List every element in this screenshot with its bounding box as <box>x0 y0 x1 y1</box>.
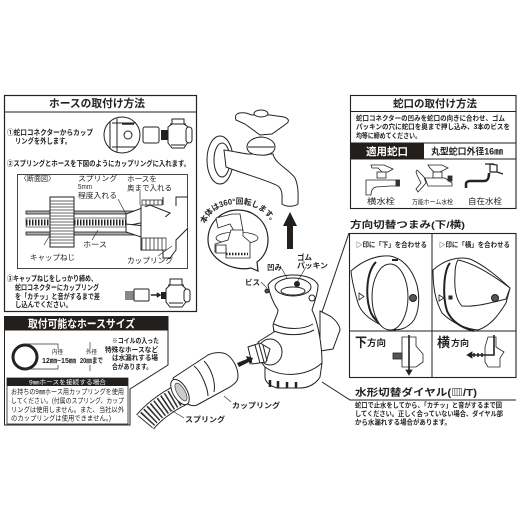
callout: rotates 360 degrees: 本体は360°回転します。 <box>200 197 274 224</box>
illustration: knob down <box>351 256 419 330</box>
diagram: hose ring dimensions <box>13 342 103 371</box>
labels: connector parts: スプリング <box>185 414 226 424</box>
step 3 text: ③キャップねじをしっかり締め、 <box>7 274 97 283</box>
labels: faucet types <box>367 196 502 206</box>
illustration: connector body <box>248 275 340 388</box>
box: connecting a 9mm hose <box>7 378 128 424</box>
cross section box: ホースを <box>127 174 157 184</box>
labels: connector parts: ゴム <box>297 252 312 262</box>
step 3 text: し込んでください。 <box>15 300 72 309</box>
instructions: パッキンの穴に蛇口を奥まで押し込み、3本のビスを <box>356 122 510 131</box>
step 1 text: ①蛇口コネクターからカップ <box>7 128 94 137</box>
panel: faucet attachment method <box>350 96 516 208</box>
leader: dial <box>322 382 516 400</box>
cross section box: スプリング <box>78 173 118 183</box>
heading: hose attachment: ホースの取付け方法 <box>49 96 145 110</box>
label: sideways: 方向 <box>451 338 469 348</box>
illustration: hose with spring and coupling <box>145 353 238 422</box>
leader line <box>322 233 349 312</box>
step 3 text <box>7 274 100 309</box>
note: coil hoses <box>105 337 159 371</box>
icon: insert coupling <box>125 279 190 307</box>
labels: faucet types: 万能ホーム水栓 <box>412 197 453 206</box>
label: sideways: 横 <box>437 335 450 350</box>
box: connecting a 9mm hose: してください。(付属のスプリング、カップ <box>11 396 124 405</box>
heading: direction switch knob: 方向切替つまみ(下/横) <box>350 219 465 231</box>
icon: swivel faucet <box>466 164 503 188</box>
cross section box <box>18 173 188 268</box>
label: align to down: ▷印に「下」を合わせる <box>356 240 427 249</box>
labels: connector parts <box>171 252 329 424</box>
cross section box: ホース <box>83 240 107 249</box>
callout: rotates 360 degrees <box>200 197 274 272</box>
label: sideways <box>437 335 469 350</box>
cross section box: 5mm <box>78 182 92 191</box>
diagram: hose ring dimensions: 20㎜まで <box>80 356 103 365</box>
box: connecting a 9mm hose: 9㎜ホースを接続する場合 <box>29 378 106 386</box>
cross section box: キャップねじ <box>30 253 75 262</box>
label: downward: 下 <box>355 335 367 350</box>
illustration: faucet <box>207 110 298 206</box>
heading: faucet attachment: 蛇口の取付け方法 <box>393 97 477 110</box>
panel: faucet attachment method: 適用蛇口 <box>366 145 408 158</box>
text: dial note: から水漏れする場合があります。 <box>355 418 451 426</box>
step 3 text: 蛇口コネクターにカップリング <box>15 283 99 292</box>
panel: direction switch knob <box>322 233 516 378</box>
text: dial note <box>355 400 503 426</box>
heading: water shape dial: 水形切替ダイヤル(▥/T) <box>355 386 477 399</box>
cross section box: カップリング <box>127 255 174 265</box>
box: connecting a 9mm hose: お持ちの9㎜ホース用カップリングを使用 <box>11 387 124 396</box>
labels: connector parts: カップリング <box>232 400 281 410</box>
panel: hose attachment method <box>4 96 196 312</box>
label: compatible faucet <box>350 143 424 159</box>
cross section box: 〈断面図〉 <box>20 173 55 183</box>
note: coil hoses: ※コイルの入った <box>112 337 159 345</box>
hose cross section <box>26 191 188 258</box>
cross section box: 奥まで入れる <box>127 182 172 192</box>
icon: side flow valve <box>467 335 504 367</box>
labels: connector parts: ビス <box>245 277 260 287</box>
diagram: hose ring dimensions: 内径 <box>52 348 63 356</box>
instructions <box>356 114 510 140</box>
labels: faucet types: 自在水栓 <box>468 196 502 206</box>
icon: universal home faucet <box>416 165 452 192</box>
heading: hose sizes: 取付可能なホースサイズ <box>28 316 135 330</box>
step 1 text: リングを外します。 <box>15 136 71 146</box>
note: coil hoses: は水漏れする場 <box>112 353 158 362</box>
box: connecting a 9mm hose: リングは使用しません。また、当社以外 <box>11 405 124 414</box>
box: connecting a 9mm hose: のカップリングは使用できません。) <box>11 414 111 422</box>
arrow: coupling into connector <box>237 356 253 367</box>
step 1 text <box>7 128 94 146</box>
step 3 text: を「カチッ」と音がするまで差 <box>15 292 100 301</box>
arrow: up to faucet <box>283 212 297 249</box>
note: coil hoses: 特殊なホースなど <box>105 345 158 354</box>
instructions: 均等に締めてください。 <box>356 131 421 140</box>
step 2 text: ②スプリングとホースを下図のようにカップリングに入れます。 <box>7 159 190 168</box>
label: downward: 方向 <box>367 337 386 348</box>
labels: connector parts: 凹み <box>267 263 282 272</box>
icon: down flow valve <box>393 335 423 375</box>
icon: remove coupling <box>104 117 192 153</box>
cross section box: 程度入れる <box>78 190 117 200</box>
panel: compatible hose sizes <box>4 316 168 425</box>
illustration: knob side <box>433 258 510 331</box>
label: round faucet 16mm: 丸型蛇口外径16㎜ <box>431 146 503 156</box>
labels: connector parts: パッキン <box>297 261 329 270</box>
instructions: 蛇口コネクターの凹みを蛇口の向きに合わせ、ゴム <box>356 114 505 122</box>
diagram: hose ring dimensions: 外径 <box>86 348 97 356</box>
labels: faucet types: 横水栓 <box>367 196 395 206</box>
label: downward <box>355 335 386 350</box>
note: coil hoses: 合があります。 <box>112 362 152 371</box>
text: dial note: 蛇口で止水をしてから、「カチッ」と音がするまで回 <box>355 400 502 410</box>
icon: horizontal faucet <box>366 165 400 195</box>
diagram: hose ring dimensions: 12㎜~15㎜ <box>42 356 76 365</box>
text: dial note: してください。正しく合っていない場合、ダイヤル部 <box>355 409 503 418</box>
label: align to side: ▷印に「横」を合わせる <box>439 240 510 249</box>
